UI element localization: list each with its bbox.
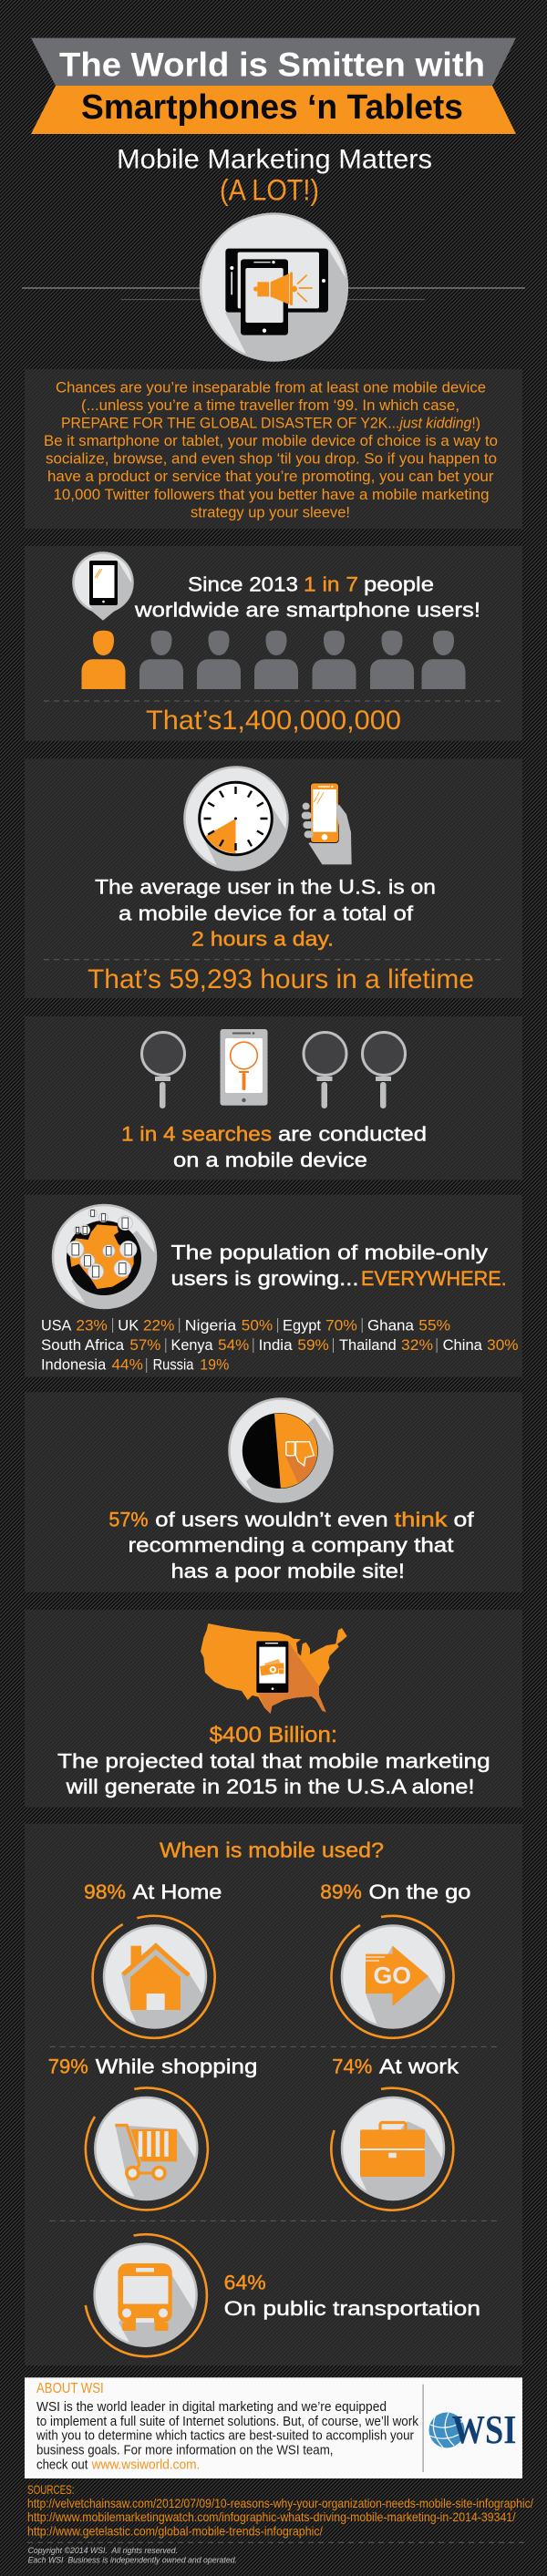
country statistics: Indonesia [41,1357,107,1374]
country statistics: 23% [76,1317,108,1334]
body text: check out [36,2457,88,2472]
country statistics: 30% [487,1337,519,1354]
label: 74% at work: At work [379,2056,459,2078]
panel: introduction: Be it smartphone or tablet, your mobile device of choice is a way to [44,432,498,449]
text: 400 billion: will generate in 2015 in the U.S.A alone! [66,1776,475,1798]
label: 89% on the go: 89% [320,1880,362,1903]
icon: home [91,1914,216,2040]
text: searches: 1 in 4 searches [121,1123,272,1146]
sources [27,2482,533,2539]
title banner [31,38,516,134]
icon: globe with phone pins [51,1203,157,1309]
body text: WSI is the world leader in digital marketing and we’re equipped [36,2399,387,2415]
headline: people [364,572,434,595]
panel: introduction [25,369,522,529]
label: 64% public transportation: On public transportation [224,2297,480,2320]
icon: shopping cart [84,2087,210,2211]
body text: with you to determine which tactics are best-suited to accomplish your [36,2428,414,2444]
label: 79% while shopping: While shopping [96,2056,257,2078]
label: 98% at home: At Home [132,1880,222,1903]
country statistics: 32% [401,1337,433,1354]
headline: EVERYWHERE. [361,1267,507,1290]
panel: introduction: Chances are you’re inseparable from at least one mobile device [56,379,486,397]
country statistics: 50% [242,1317,274,1334]
label: 74% at work: 74% [332,2056,372,2078]
copyright: Each WSI Business is independently owned and operated. [28,2556,237,2566]
icon: magnifier 3 [363,1032,405,1108]
text: 57% of users: has a poor mobile site! [171,1560,405,1582]
text: average user [95,876,436,950]
subtitle: Mobile Marketing Matters [117,144,432,175]
headline: 1 in 7 [304,572,358,595]
country statistics: South Africa [41,1337,125,1354]
icon: phone with magnifier [221,1029,268,1106]
subtitle [117,144,432,207]
country statistics: UK [118,1317,139,1334]
country statistics: Thailand [339,1337,397,1354]
icon: magnifier 2 [304,1032,346,1108]
label: 64% public transportation: 64% [224,2271,266,2293]
country statistics: 55% [418,1317,450,1334]
icon: phone pin [72,551,134,621]
panel: introduction: socialize, browse, and even shop ‘til you drop. So if you happen to [46,450,497,468]
country statistics: Ghana [367,1317,415,1334]
headline [134,572,480,622]
subtitle: (A LOT!) [220,174,319,207]
title banner: Smartphones ‘n Tablets [81,88,463,127]
country statistics: 70% [325,1317,357,1334]
panel: 1 in 7 smartphone users [25,546,522,741]
text: average user: a mobile device for a total of [119,902,414,924]
country statistics: Egypt [283,1317,321,1334]
country statistics: Russia [153,1357,194,1374]
country statistics: 57% [129,1337,161,1354]
headline: Since 2013 [188,572,298,595]
title banner: The World is Smitten with [59,46,485,84]
text: average user: 2 hours a day. [191,927,334,950]
country statistics: China [443,1337,483,1354]
headline: worldwide are smartphone users! [134,599,480,622]
text: searches [121,1123,427,1171]
sources: http://www.getelastic.com/global-mobile-trends-infographic/ [27,2524,323,2539]
country statistics: Nigeria [185,1317,237,1334]
panel: 400 billion [25,1610,522,1808]
copyright [28,2546,237,2566]
text: 400 billion [57,1723,490,1798]
heading: When is mobile used? [160,1838,384,1861]
panel: about WSI [25,2377,522,2478]
text: 400 billion: $400 Billion: [210,1723,337,1747]
label: 89% on the go: On the go [368,1880,470,1903]
headline: The population of mobile-only [171,1242,489,1264]
sources: SOURCES: [27,2482,75,2497]
panel: introduction: have a product or service that you’re promoting, you can bet your [47,468,494,485]
people row [82,631,465,689]
body text: www.wsiworld.com. [91,2457,200,2472]
label: 74% at work [332,2056,459,2078]
label: 89% on the go [320,1880,470,1903]
country statistics: 19% [200,1357,230,1374]
stat: 1,400,000,000: That’s1,400,000,000 [146,706,401,736]
label: 79% while shopping: 79% [48,2056,88,2078]
country statistics: 59% [297,1337,329,1354]
panel: introduction: 10,000 Twitter followers that you better have a mobile marketing [53,486,489,503]
logo: WSI: WSI [452,2407,516,2452]
text: 57% of users: recommending a company that [128,1534,454,1557]
heading: ABOUT WSI [36,2381,104,2396]
body text: to implement a full suite of Internet solutions. But, of course, we’ll work [36,2414,418,2429]
panel: when is mobile used [25,1824,522,2370]
text: searches: are conducted [278,1123,427,1146]
text: 57% of users: think [394,1508,448,1530]
country statistics: 54% [218,1337,250,1354]
panel: 1 in 4 searches [25,1016,522,1180]
country statistics: India [259,1337,293,1354]
label: 98% at home [84,1880,222,1903]
icon: devices with megaphone [201,213,365,365]
icon: USA map with phone [201,1623,347,1714]
panel: poor mobile site [25,1392,522,1592]
panel: introduction: PREPARE FOR THE GLOBAL DISASTER OF Y2K...just kidding!) [61,414,480,431]
panel: 2 hours a day [25,758,522,998]
text: 57% of users: of users wouldn’t even [155,1508,388,1530]
label: 64% public transportation [224,2271,480,2320]
headline [171,1242,507,1290]
icon: magnifier 1 [142,1032,184,1108]
country statistics: USA [41,1317,71,1334]
text: 57% of users: of [454,1508,475,1530]
headline: users is growing... [171,1267,359,1290]
text: searches: on a mobile device [173,1149,367,1171]
country statistics [41,1317,519,1374]
label: 79% while shopping [48,2056,257,2078]
panel: introduction: (...unless you’re a time traveller from ‘99. In which case, [81,397,459,414]
icon: go arrow: GO [374,1962,411,1989]
stat: hours in a lifetime: That’s 59,293 hours in a lifetime [88,964,474,994]
country statistics: 44% [111,1357,143,1374]
icon: pie chart with thumbs down [228,1397,334,1503]
text: 400 billion: The projected total that mobile marketing [57,1749,490,1772]
text: 57% of users: 57% [108,1508,149,1530]
icon: go arrow [330,1914,455,2040]
icon: hand holding phone [302,782,352,864]
icon: bus [84,2233,208,2357]
label: 98% at home: 98% [84,1880,126,1903]
icon: clock [183,766,289,871]
panel: introduction: strategy up your sleeve! [191,503,350,520]
body text: business goals. For more information on the WSI team, [36,2442,334,2458]
country statistics: Kenya [171,1337,213,1354]
text: 57% of users [108,1508,475,1582]
text: average user: The average user in the U.S. is on [95,876,436,899]
copyright: Copyright ©2014 WSI. All rights reserved. [28,2546,178,2556]
logo: WSI [428,2407,516,2452]
icon: briefcase [331,2088,465,2215]
country statistics: 22% [143,1317,175,1334]
panel: mobile-only users [25,1195,522,1377]
body text [36,2399,418,2472]
